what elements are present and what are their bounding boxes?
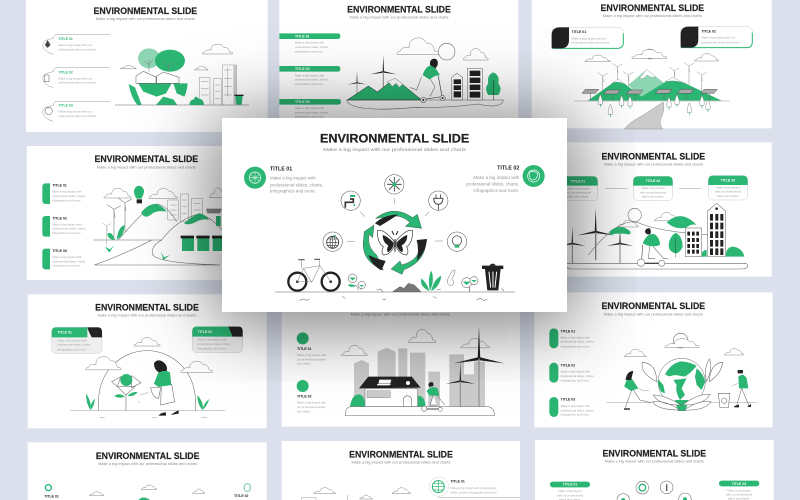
list item 1: professional slides, charts, xyxy=(52,194,86,198)
card 2: Make a big impact with our xyxy=(701,36,735,40)
list item 3 xyxy=(42,249,86,269)
subheading: Make a big impact with our professional slides and charts xyxy=(604,312,703,316)
list item 1: Make a big impact with xyxy=(295,41,324,45)
list item 1: professional slides, charts, xyxy=(561,340,595,344)
list item 2: professional slides, charts, xyxy=(561,374,595,378)
butterfly xyxy=(377,230,413,255)
card 1: Make a big impact with our xyxy=(572,36,606,40)
list item 3: professional slides, charts, xyxy=(561,408,595,412)
list item 2: infographics and more. xyxy=(561,379,590,383)
heading: ENVIRONMENTAL SLIDE xyxy=(601,301,705,311)
illustration: globe, trees, buildings xyxy=(115,44,249,105)
list item 1 xyxy=(549,328,595,348)
subheading: Make a big impact with our professional slides and charts xyxy=(351,313,450,317)
list item 1: TITLE 01 xyxy=(52,184,67,188)
list item 1 xyxy=(42,183,86,204)
list item 2: our professional slides xyxy=(297,405,326,409)
list item 2: professional slides, charts, xyxy=(52,227,86,231)
list item 1: infographics and more. xyxy=(52,198,82,202)
list item 1: TITLE 01 xyxy=(561,329,575,333)
list item 1: TITLE 01 xyxy=(58,37,73,41)
list item 1 xyxy=(43,34,110,54)
clouds xyxy=(302,488,520,500)
list item 3: TITLE 03 xyxy=(561,398,575,402)
title 02 with icon xyxy=(234,484,250,498)
illustration: person watering flower xyxy=(70,337,225,418)
list item 3: TITLE 03 xyxy=(52,249,67,253)
heading: ENVIRONMENTAL SLIDE xyxy=(347,5,451,15)
slide: middle left, hills and bins xyxy=(27,146,265,280)
list item 2: TITLE 02 xyxy=(561,364,575,368)
globe badge and title 01: TITLE 01 xyxy=(450,480,465,484)
recycling arrows xyxy=(363,211,427,274)
text block: title 01: Make a big impact with xyxy=(270,176,316,181)
heading: ENVIRONMENTAL SLIDE xyxy=(94,154,198,164)
list item 1 xyxy=(279,33,340,53)
trash bin xyxy=(482,264,503,290)
heading: ENVIRONMENTAL SLIDE xyxy=(601,152,705,162)
flowers xyxy=(348,274,365,290)
list item 3: Make a big impact with xyxy=(561,404,590,408)
heading: ENVIRONMENTAL SLIDE xyxy=(349,450,453,460)
plant xyxy=(421,271,441,291)
list item 2: Make a big impact with our xyxy=(58,76,92,80)
card 2: TITLE 02 xyxy=(701,30,716,34)
title 01: with our professional xyxy=(557,493,583,497)
card 3: Make a big impact xyxy=(716,185,740,189)
bicycle xyxy=(288,259,340,291)
card 1: infographics and more. xyxy=(57,347,87,351)
slide: lower right, globe and people xyxy=(534,292,773,427)
list item 1: TITLE 01 xyxy=(297,347,312,351)
text block: title 01: professional slides, charts, xyxy=(270,182,323,187)
card 2: slides and charts. xyxy=(642,195,664,199)
subheading: Make a big impact with our professional slides and charts xyxy=(97,313,197,317)
slide: lower centre, house and city xyxy=(282,295,520,427)
list item 1: infographics and more. xyxy=(561,344,590,348)
list item 3: TITLE 03 xyxy=(58,104,73,108)
list item 2: professional slides and charts. xyxy=(58,81,97,85)
subheading: Make a big impact with our professional slides and charts xyxy=(604,163,703,167)
clouds xyxy=(89,485,205,500)
slide: middle right, scooter and city xyxy=(532,142,772,277)
card 1: with our professional xyxy=(565,190,591,194)
card 2: TITLE 02 xyxy=(198,330,212,334)
card 3 xyxy=(708,176,748,200)
badge: title 02 icon xyxy=(523,165,545,187)
card 1: Make a big impact with xyxy=(57,339,87,343)
icon: plug xyxy=(429,191,448,210)
card 1: Make a big impact xyxy=(566,186,590,190)
list item 1: Make a big impact with our xyxy=(58,43,92,47)
heading: ENVIRONMENTAL SLIDE xyxy=(602,448,706,458)
card 2: infographics and more. xyxy=(198,346,227,350)
card 2: Make a big impact xyxy=(641,186,665,190)
globe badge and title 01: slides, charts, infographics and more. xyxy=(450,490,498,494)
card 3: TITLE 03 xyxy=(721,179,735,183)
list item 3 xyxy=(279,99,341,119)
card 1: slides and charts. xyxy=(567,195,589,199)
illustration: turbines, scooter rider, buildings xyxy=(559,203,748,269)
subheading: Make a big impact with our professional slides and charts xyxy=(98,462,197,466)
list item 3: professional slides, charts, xyxy=(52,259,86,263)
list item 3: infographics and more. xyxy=(52,264,82,268)
slide: lower left, watering flower xyxy=(28,294,267,428)
card 3: slides and charts. xyxy=(717,194,739,198)
list item 3 xyxy=(43,101,110,121)
heading: ENVIRONMENTAL SLIDE xyxy=(320,131,469,145)
subheading: Make a big impact with our professional slides and charts xyxy=(96,17,195,21)
list item 2 xyxy=(549,363,595,383)
illustration: mountains, turbines, road xyxy=(574,49,730,129)
heading: ENVIRONMENTAL SLIDE xyxy=(96,451,199,461)
card 3: with our professional xyxy=(715,190,741,194)
list item 1: Make a big impact with xyxy=(297,353,326,357)
slide: bottom left, partially visible xyxy=(28,442,267,500)
rocks xyxy=(393,283,421,292)
list item 2 xyxy=(43,68,110,88)
list item 1: Make a big impact with xyxy=(561,335,590,339)
subheading: Make a big impact with our professional slides and charts xyxy=(351,461,451,465)
list item 3: professional slides, charts, xyxy=(295,110,329,114)
heading: ENVIRONMENTAL SLIDE xyxy=(95,302,199,312)
list item 2: Make a big impact with xyxy=(295,73,324,77)
title 01: Make a big impact xyxy=(558,489,582,493)
subheading: Make a big impact with our professional slides and charts xyxy=(605,459,704,463)
icon: light bulb xyxy=(447,232,467,251)
title 01 with icon: TITLE 01 xyxy=(44,495,59,499)
list item 3: Make a big impact with xyxy=(52,255,82,259)
list item 2: Make a big impact with xyxy=(52,222,82,226)
list item 2: Make a big impact with xyxy=(297,401,326,405)
card 1 xyxy=(558,176,598,201)
card 2: TITLE 02 xyxy=(646,179,660,183)
card 2 xyxy=(681,27,752,48)
card 2: Make a big impact with xyxy=(198,338,227,342)
icon circles xyxy=(617,481,691,500)
heading: ENVIRONMENTAL SLIDE xyxy=(600,3,704,13)
subheading: Make a big impact with our professional slides and charts xyxy=(603,14,702,18)
card 1: professional slides, charts, xyxy=(57,343,91,347)
title 03: TITLE 03 xyxy=(732,482,746,486)
list item 1: professional slides and charts. xyxy=(58,47,97,51)
list item 1: TITLE 01 xyxy=(295,34,310,38)
icon: globe xyxy=(323,232,342,251)
list item 2 xyxy=(279,66,340,86)
list item 3: infographics and more. xyxy=(295,115,324,119)
list item 2 xyxy=(42,216,86,237)
card 2 xyxy=(633,176,673,201)
title 01 xyxy=(550,482,590,500)
list item 3: Make a big impact with our xyxy=(58,110,92,114)
list item 1: professional slides, charts, xyxy=(295,45,329,49)
slide: bottom centre, partially visible xyxy=(282,441,520,500)
globe badge and title 01 xyxy=(429,477,498,496)
list item 2: TITLE 02 xyxy=(58,70,73,74)
list item 2: professional slides, charts, xyxy=(295,78,329,82)
card 2: professional slides, charts, xyxy=(198,342,232,346)
title 03: with our professional xyxy=(726,493,752,497)
list item 3: Make a big impact with xyxy=(295,106,324,110)
illustration: globe with people and bin xyxy=(607,333,757,411)
list item 1 xyxy=(297,332,326,366)
heading: ENVIRONMENTAL SLIDE xyxy=(93,6,197,16)
card 2: professional slides and charts. xyxy=(701,40,740,44)
badge: title 01 icon xyxy=(244,167,266,189)
illustration: house, city, turbines xyxy=(342,327,504,416)
list item 2: Make a big impact with xyxy=(561,370,590,374)
title 01: TITLE 01 xyxy=(563,483,577,487)
main slide: central environmental recycling infographic xyxy=(222,118,567,312)
list item 3 xyxy=(549,397,595,417)
title 03: Make a big impact xyxy=(727,488,751,492)
list item 3: infographics and more. xyxy=(561,413,590,417)
text block: title 02: TITLE 02 xyxy=(497,166,519,172)
card 1: TITLE 01 xyxy=(571,179,585,183)
water drop outline xyxy=(447,270,455,285)
illustration: scooter rider xyxy=(347,38,503,109)
flower right xyxy=(462,277,478,292)
list item 1: infographics and more. xyxy=(295,49,324,53)
list item 1: our professional slides xyxy=(297,357,326,361)
card 2 xyxy=(192,327,243,353)
slide: top right, mountains and turbines xyxy=(532,0,772,129)
subheading: Make a big impact with our professional slides and charts xyxy=(349,15,449,19)
ground line xyxy=(275,288,515,300)
text block: title 02: infographics and more. xyxy=(473,188,519,193)
card 1 xyxy=(52,327,102,353)
list item 2: infographics and more. xyxy=(295,82,324,86)
card 1 xyxy=(552,27,623,48)
globe badge and title 01: Make a big impact with professional xyxy=(450,486,496,490)
card 1: TITLE 01 xyxy=(57,331,72,335)
list item 3: TITLE 03 xyxy=(295,100,310,104)
slide: bottom right, partially visible xyxy=(535,440,774,500)
slide: top left, globe and houses xyxy=(26,0,268,132)
text block: title 01: TITLE 01 xyxy=(270,167,292,173)
list item 2: and charts. xyxy=(297,409,311,413)
slide: top centre, scooter and mountains xyxy=(279,0,518,120)
list item 1: and charts. xyxy=(297,362,311,366)
card 1: professional slides and charts. xyxy=(572,41,610,45)
subheading: Make a big impact with our professional slides and charts xyxy=(323,147,467,153)
list item 2: TITLE 02 xyxy=(295,67,310,71)
icon: water tap xyxy=(341,191,360,210)
list item 2: infographics and more. xyxy=(52,231,82,235)
list item 2 xyxy=(297,380,326,413)
list item 3: professional slides and charts. xyxy=(58,114,97,118)
card 2: with our professional xyxy=(640,190,666,194)
list item 2: TITLE 02 xyxy=(297,394,312,398)
text block: title 02 xyxy=(466,166,520,193)
list item 2: TITLE 02 xyxy=(52,216,67,220)
text block: title 02: Make a big impact with xyxy=(473,175,520,180)
list item 1: Make a big impact with xyxy=(52,190,82,194)
illustration: hills, bins, turbines xyxy=(93,186,226,265)
subheading: Make a big impact with our professional slides and charts xyxy=(97,165,196,169)
title 03 xyxy=(719,481,759,500)
text block: title 01 xyxy=(270,167,323,194)
text block: title 02: professional slides, charts, xyxy=(466,181,519,186)
card 1: TITLE 01 xyxy=(572,30,586,34)
icon: flower xyxy=(385,175,404,194)
text block: title 01: infographics and more. xyxy=(270,189,316,194)
title 01 with icon xyxy=(44,485,59,499)
title 02 with icon: TITLE 02 xyxy=(234,494,249,498)
